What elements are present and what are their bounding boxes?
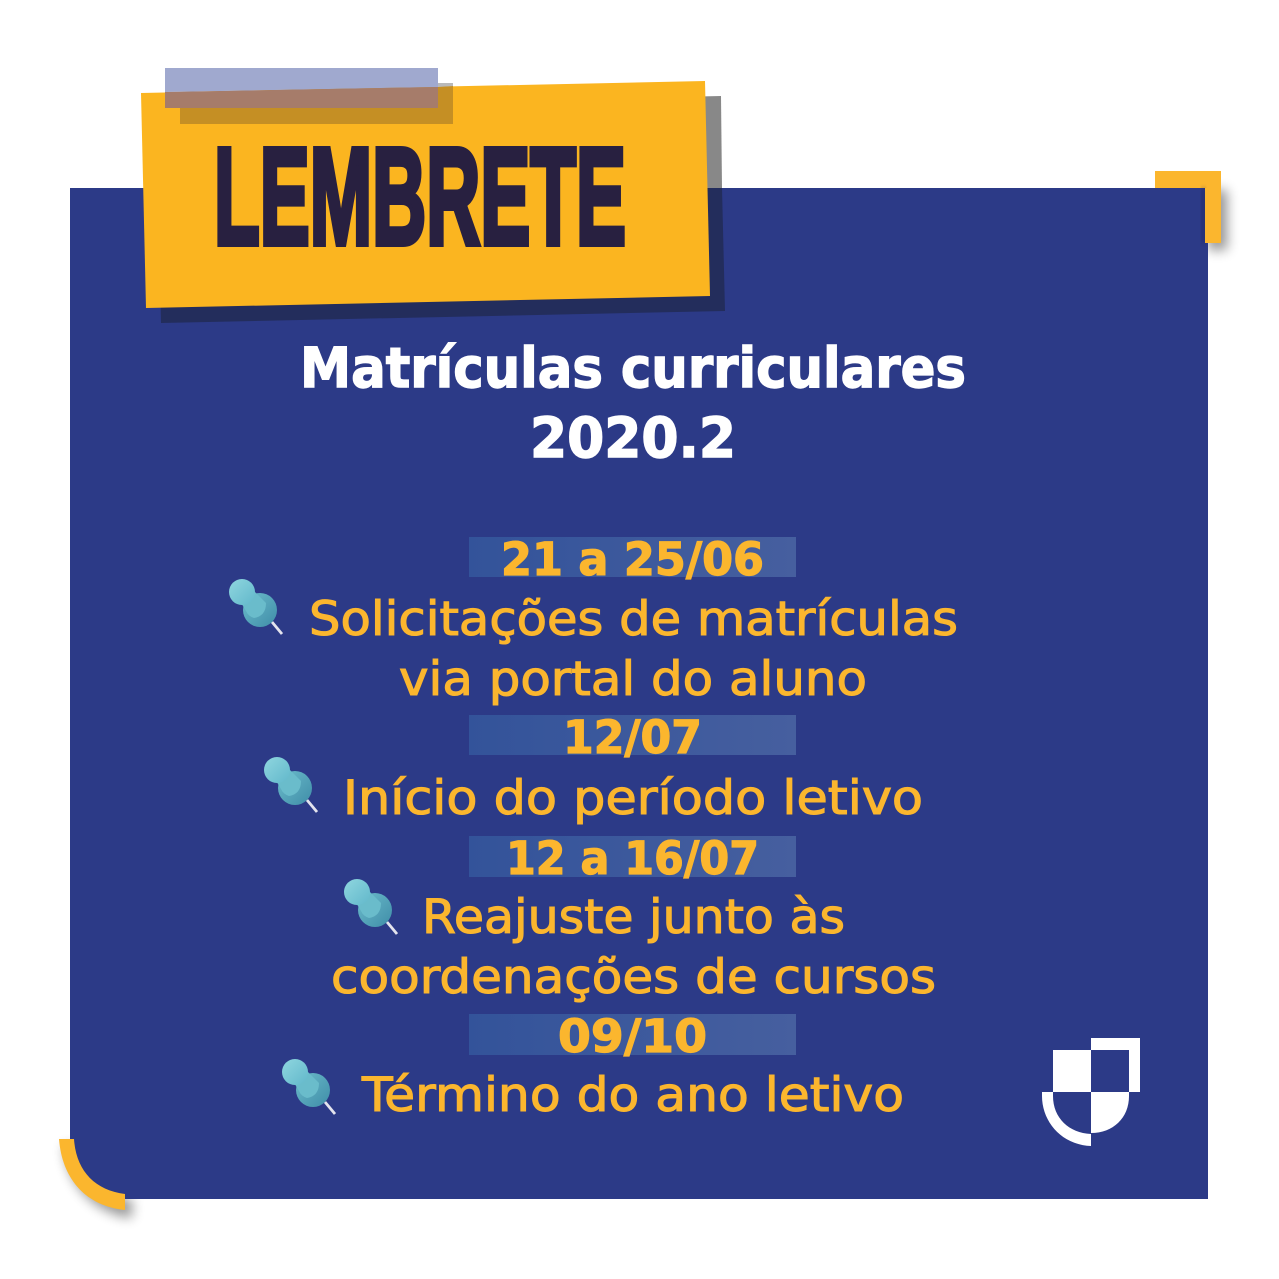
note paper	[141, 81, 710, 308]
date bar 3: 12 a 16/07	[506, 832, 759, 885]
corner accent: top right	[1155, 171, 1227, 250]
icon: pin 1	[229, 579, 282, 634]
tape: upper over white	[165, 68, 438, 92]
note: Lembrete banner	[141, 68, 725, 323]
date bar 2	[469, 711, 796, 764]
note shadow over white	[156, 96, 722, 188]
tape: lower piece on paper	[180, 86, 453, 124]
corner accent: bottom left shadow	[64, 1146, 132, 1218]
heading: LEMBRETE: LEMBRETE	[214, 120, 626, 274]
date bar 1: 21 a 25/06	[501, 533, 764, 586]
panel: blue background	[70, 188, 1208, 1199]
item 3 text: Reajuste junto às	[422, 890, 845, 945]
title	[300, 336, 966, 470]
title: Matrículas curriculares	[300, 336, 966, 400]
item 3 text: coordenações de cursos	[331, 950, 936, 1005]
date bar 4	[469, 1010, 796, 1063]
logo: shield	[1042, 1038, 1140, 1146]
item 2 text: Início do período letivo	[343, 771, 923, 826]
tape: lower piece over white	[438, 83, 453, 87]
icon: pin 3	[344, 879, 397, 934]
tape: overlap	[165, 87, 438, 108]
item 1 text	[309, 592, 958, 707]
item 3 text	[331, 890, 936, 1005]
title: 2020.2	[530, 406, 736, 470]
date bar 2: 12/07	[563, 711, 702, 764]
note shadow over panel	[158, 188, 725, 323]
icon: pin 2	[264, 757, 317, 812]
item 4 text: Término do ano letivo	[361, 1068, 904, 1123]
item 1 text: Solicitações de matrículas	[309, 592, 958, 647]
corner accent: top right inner edge	[1202, 188, 1221, 243]
corner accent: bottom left	[59, 1139, 125, 1210]
date bar 4: 09/10	[558, 1010, 707, 1063]
icon: pin 4	[282, 1059, 335, 1114]
item 1 text: via portal do aluno	[399, 652, 867, 707]
